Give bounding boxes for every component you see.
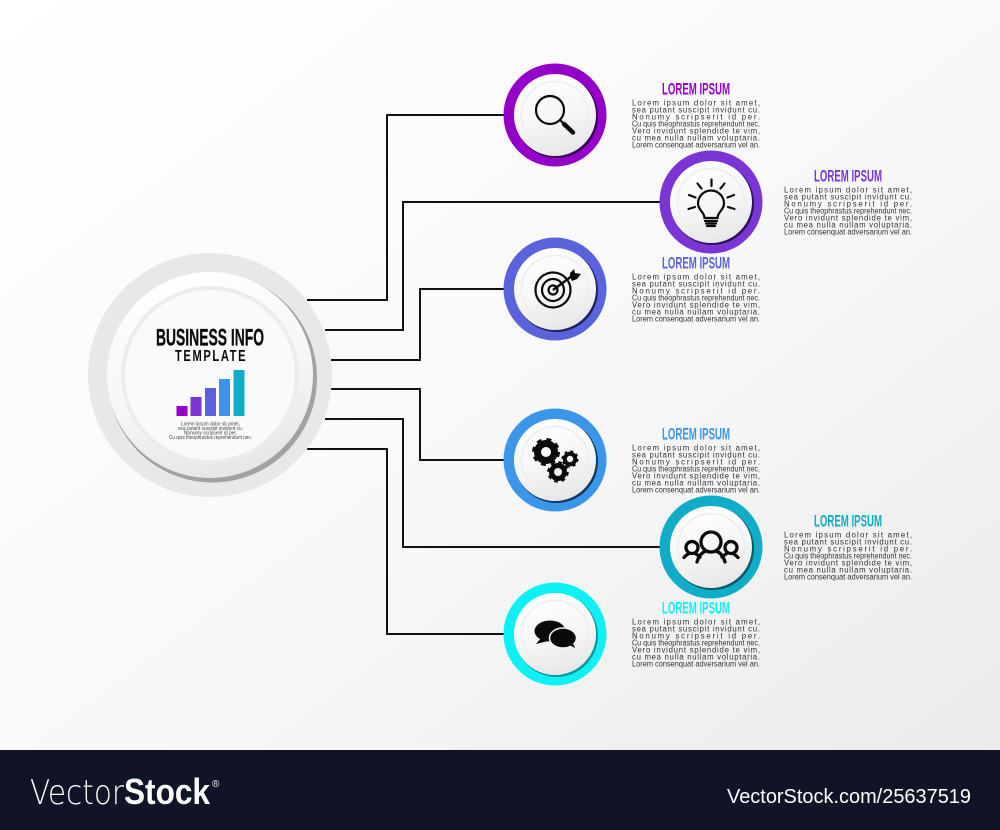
text 4: Cu quis theophrastus reprehendunt nec.: [632, 464, 760, 474]
connector lines: [307, 115, 661, 634]
central hub: [88, 253, 332, 497]
text 2: LOREM IPSUM: [814, 168, 882, 186]
hub title: BUSINESS INFO: [156, 324, 264, 352]
text 1: Cu quis theophrastus reprehendunt nec.: [632, 120, 760, 128]
text 4: Lorem consenquat adversarium vel an.: [632, 486, 760, 494]
text 1: cu mea nulla nullam voluptaria.: [632, 134, 760, 142]
node 1: search: [504, 64, 606, 166]
text 2: sea putant suscipit invidunt cu.: [784, 192, 912, 202]
text 6: Lorem consenquat adversarium vel an.: [632, 660, 760, 668]
text 1: [632, 80, 760, 150]
text 3: cu mea nulla nullam voluptaria.: [632, 308, 760, 316]
hub caption: Nonumy scripserit id per.: [184, 430, 237, 436]
icon: magnifier: [536, 96, 573, 132]
text 1: LOREM IPSUM: [662, 80, 730, 98]
text 4: Nonumy scripserit id per.: [632, 458, 760, 466]
hub subtitle: TEMPLATE: [175, 347, 246, 364]
text 2: cu mea nulla nullam voluptaria.: [784, 220, 912, 230]
text 3: sea putant suscipit invidunt cu.: [632, 280, 760, 288]
text 4: Vero invidunt splendide te vim,: [632, 472, 760, 480]
text 6: Vero invidunt splendide te vim,: [632, 646, 760, 654]
text 2: Nonumy scripserit id per.: [784, 200, 912, 208]
text 3: [632, 254, 760, 324]
text 1: sea putant suscipit invidunt cu.: [632, 106, 760, 114]
text 5: Vero invidunt splendide te vim,: [784, 558, 912, 568]
text 6: cu mea nulla nullam voluptaria.: [632, 652, 760, 662]
node 5: team: [660, 496, 762, 598]
text 2: Lorem consenquat adversarium vel an.: [784, 228, 912, 236]
node 3: target: [504, 238, 606, 340]
text 3: Vero invidunt splendide te vim,: [632, 300, 760, 310]
text 1: Lorem consenquat adversarium vel an.: [632, 140, 760, 150]
text 1: Nonumy scripserit id per.: [632, 112, 760, 122]
text 5: Lorem consenquat adversarium vel an.: [784, 572, 912, 582]
text 2: Cu quis theophrastus reprehendunt nec.: [784, 206, 912, 216]
text 3: Lorem ipsum dolor sit amet,: [632, 272, 760, 282]
node 2: idea: [660, 150, 762, 254]
footer id: VectorStock.com/25637519: [727, 786, 971, 808]
icon: people: [684, 532, 738, 562]
node 6: chat: [504, 582, 606, 686]
text 3: LOREM IPSUM: [662, 254, 730, 272]
text 5: Lorem ipsum dolor sit amet,: [784, 530, 912, 540]
text 5: [784, 512, 912, 582]
text 6: [632, 600, 760, 668]
text 4: [632, 426, 760, 494]
text 5: sea putant suscipit invidunt cu.: [784, 538, 912, 546]
hub caption: sea putant suscipit invidunt cu.: [178, 426, 243, 432]
text 5: LOREM IPSUM: [814, 512, 882, 530]
icon: target with arrow: [536, 269, 581, 308]
text 6: Lorem ipsum dolor sit amet,: [632, 618, 760, 626]
hub caption: [169, 422, 252, 441]
hub caption: Lorem ipsum dolor sit amet,: [181, 422, 240, 428]
text 4: cu mea nulla nullam voluptaria.: [632, 478, 760, 488]
text 2: Lorem ipsum dolor sit amet,: [784, 186, 912, 194]
text 1: Lorem ipsum dolor sit amet,: [632, 98, 760, 108]
text 5: Cu quis theophrastus reprehendunt nec.: [784, 552, 912, 560]
text 6: sea putant suscipit invidunt cu.: [632, 624, 760, 634]
text 3: Lorem consenquat adversarium vel an.: [632, 314, 760, 324]
icon: light bulb: [688, 180, 734, 226]
text 6: Nonumy scripserit id per.: [632, 632, 760, 640]
icon: speech bubbles: [534, 620, 576, 648]
text 2: Vero invidunt splendide te vim,: [784, 214, 912, 222]
text 4: Lorem ipsum dolor sit amet,: [632, 444, 760, 452]
text 6: LOREM IPSUM: [662, 600, 730, 618]
text 6: Cu quis theophrastus reprehendunt nec.: [632, 638, 760, 648]
text 1: Vero invidunt splendide te vim,: [632, 126, 760, 136]
bar chart: [176, 370, 244, 416]
footer bar: [0, 750, 1000, 830]
node 4: gears: [504, 408, 606, 512]
text 5: Nonumy scripserit id per.: [784, 544, 912, 554]
text 2: [784, 168, 912, 236]
icon: gears: [534, 440, 578, 482]
footer logo: [30, 771, 220, 813]
footer logo: ®: [212, 779, 220, 790]
text 3: Cu quis theophrastus reprehendunt nec.: [632, 294, 760, 302]
footer logo: Stock: [124, 771, 211, 812]
text 4: sea putant suscipit invidunt cu.: [632, 450, 760, 460]
text 3: Nonumy scripserit id per.: [632, 286, 760, 296]
hub caption: Cu quis theophrastus reprehendunt nec.: [169, 435, 252, 441]
text 4: LOREM IPSUM: [662, 426, 730, 444]
footer logo: Vector: [30, 773, 124, 813]
text 5: cu mea nulla nullam voluptaria.: [784, 566, 912, 574]
